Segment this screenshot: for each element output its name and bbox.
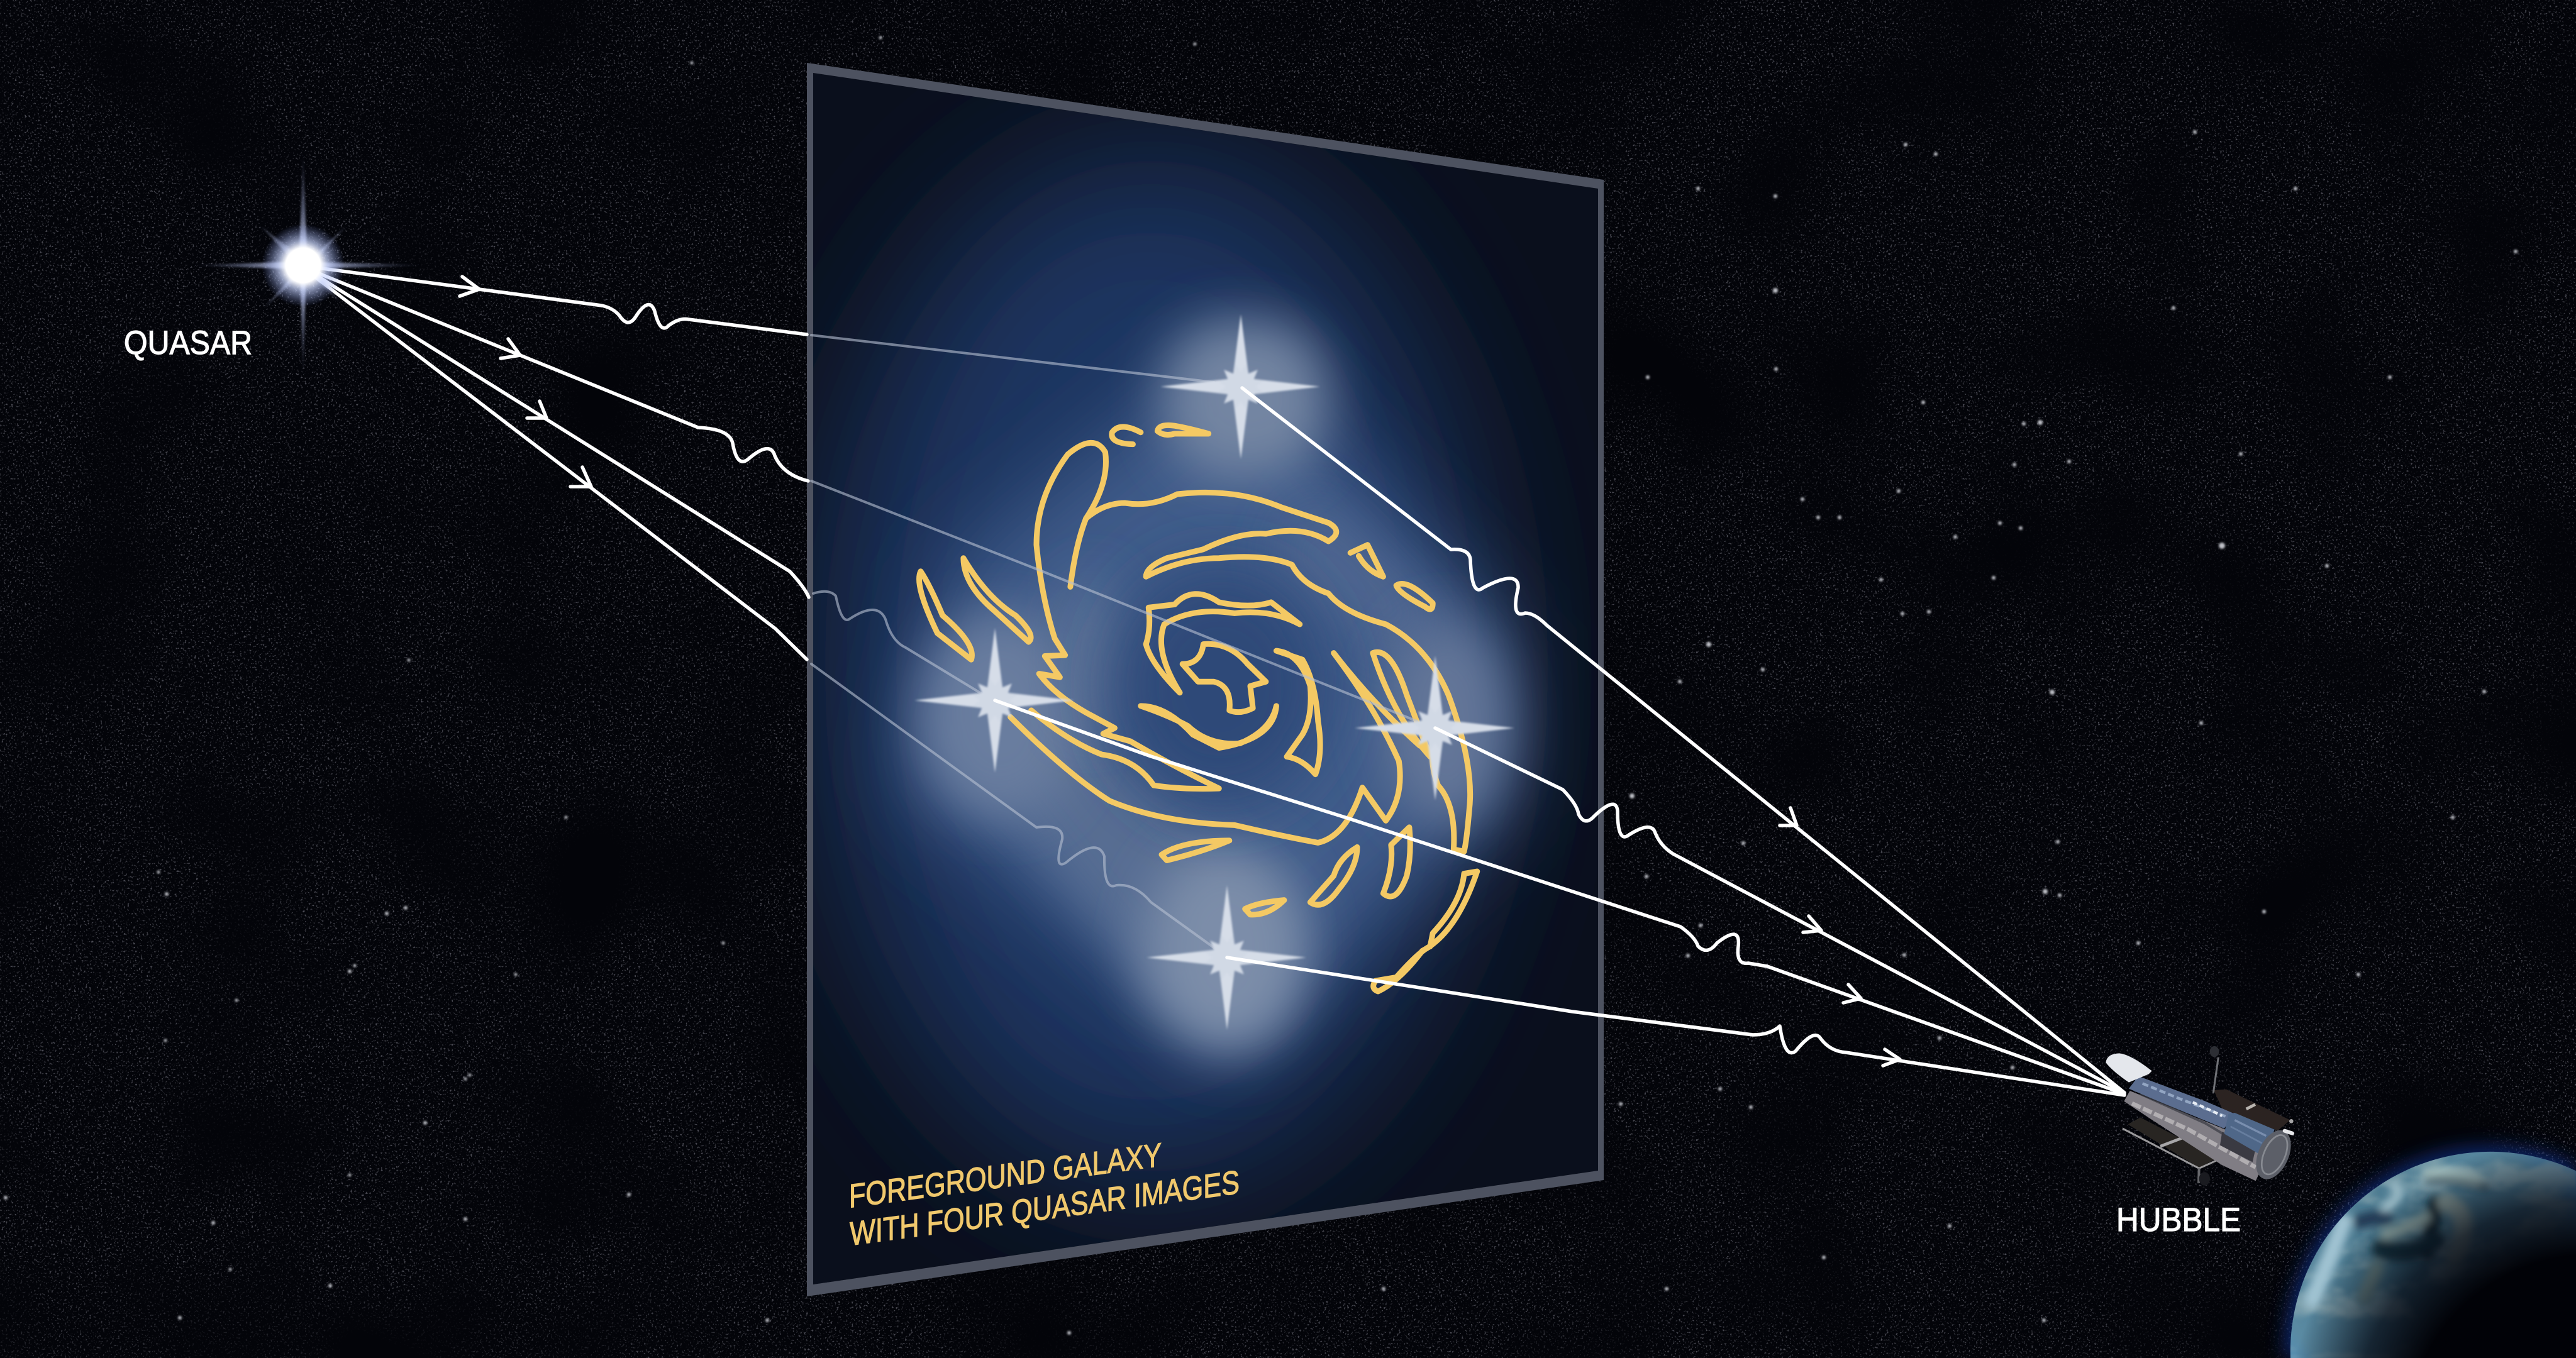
caption: foreground galaxy: WITH FOUR QUASAR IMAGES xyxy=(850,1164,1240,1253)
star image: right xyxy=(1355,656,1514,800)
lower silver body xyxy=(2124,1091,2268,1181)
quasar xyxy=(192,151,434,377)
earth xyxy=(2284,1144,2576,1358)
star image: bottom xyxy=(1146,885,1306,1030)
panel glow background xyxy=(805,57,1610,1301)
star image: top xyxy=(1160,314,1320,459)
caption: foreground galaxy: FOREGROUND GALAXY xyxy=(849,1137,1162,1215)
label: hubble: HUBBLE xyxy=(2116,1201,2241,1239)
panel: foreground galaxy plane xyxy=(805,57,1610,1301)
faint light rays inside panel xyxy=(811,335,1417,954)
lower solar panel xyxy=(2123,1117,2220,1186)
quasar diffraction spikes xyxy=(192,151,434,377)
ray 2 xyxy=(308,269,2124,1093)
aperture door xyxy=(2106,1053,2152,1083)
quasar image stars xyxy=(914,314,1514,1030)
label: quasar: QUASAR xyxy=(124,324,252,362)
ray 1 xyxy=(308,267,2124,1093)
light rays from lensed images to Hubble xyxy=(308,267,2124,1095)
upper solar panel xyxy=(2214,1090,2290,1130)
small handles xyxy=(2246,1105,2255,1109)
hubble space telescope xyxy=(2106,1046,2298,1186)
galaxy spiral outline xyxy=(919,425,1477,991)
high gain antenna mast xyxy=(2210,1046,2219,1093)
star image: left xyxy=(914,628,1074,773)
aft shroud xyxy=(2249,1125,2298,1184)
panel frame xyxy=(807,63,1604,1296)
ray 3 xyxy=(308,270,2124,1094)
upper blue tube section xyxy=(2129,1076,2235,1129)
ray 4 xyxy=(308,272,2124,1095)
